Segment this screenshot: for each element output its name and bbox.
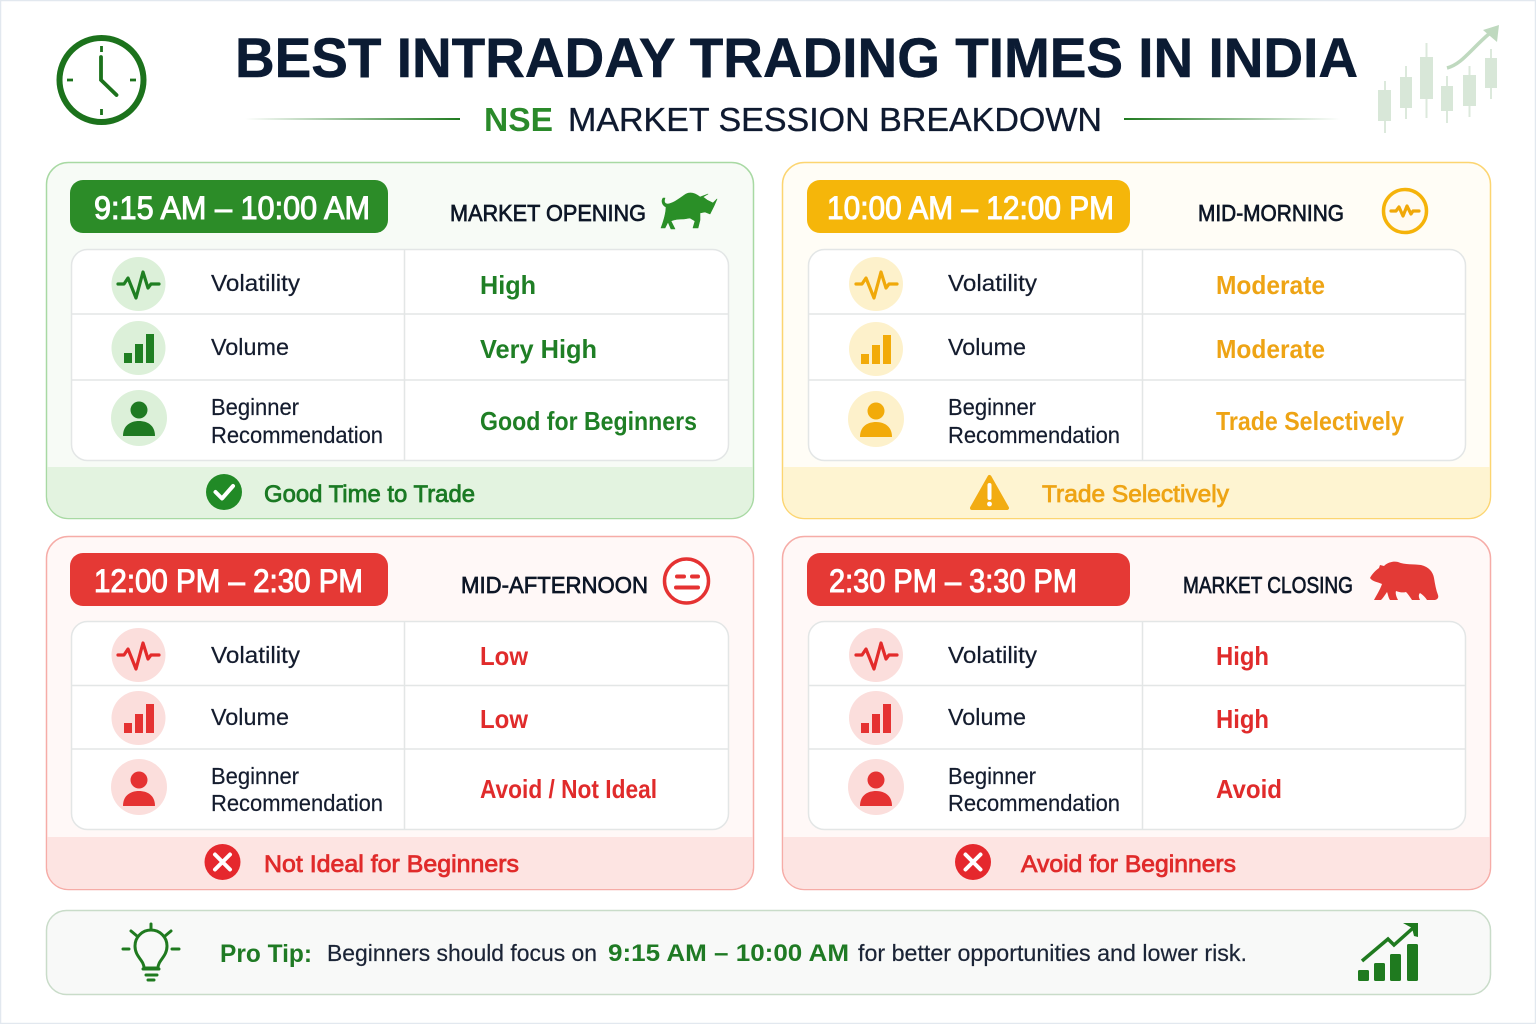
row: volume	[112, 691, 529, 745]
row: volatility	[849, 628, 1269, 682]
tip text: Beginners should focus on	[327, 940, 597, 966]
row: beginner recommendation	[111, 759, 657, 816]
metrics table	[72, 250, 728, 460]
session name: MID-AFTERNOON	[461, 572, 648, 598]
verdict: trade selectively	[972, 477, 1230, 508]
row: beginner recommendation: Recommendation	[211, 790, 383, 816]
row: volume: Moderate	[1216, 334, 1325, 364]
verdict: avoid for beginners	[955, 844, 1236, 880]
row: volatility: Moderate	[1216, 270, 1325, 300]
row: beginner recommendation: Beginner	[211, 394, 299, 420]
panel: pro tip	[46, 910, 1490, 994]
row: beginner recommendation	[848, 391, 1404, 448]
tip text: Pro Tip:	[220, 940, 312, 968]
row: beginner recommendation: Avoid	[1216, 774, 1282, 804]
time badge: 9:15 AM – 10:00 AM	[94, 190, 370, 226]
time badge: 2:30 PM – 3:30 PM	[829, 563, 1077, 599]
row: volatility: Volatility	[211, 642, 301, 668]
row: volume: High	[1216, 704, 1269, 734]
metrics table	[808, 250, 1466, 460]
time badge: 12:00 PM – 2:30 PM	[94, 563, 363, 599]
icon: light bulb	[123, 924, 179, 980]
row: volatility	[112, 257, 536, 311]
row: volatility	[849, 257, 1325, 311]
time badge	[70, 553, 388, 606]
row: beginner recommendation: Avoid / Not Ideal	[480, 774, 657, 804]
subtitle: NSE	[484, 101, 553, 138]
row: volume: Volume	[948, 334, 1026, 360]
row: volume: Volume	[948, 704, 1026, 730]
row: volume	[849, 322, 1325, 376]
row: volatility: High	[1216, 641, 1269, 671]
row: volatility: Low	[480, 641, 529, 671]
verdict: avoid for beginners: Avoid for Beginners	[1021, 851, 1236, 878]
title: BEST INTRADAY TRADING TIMES IN INDIA	[235, 26, 1358, 89]
verdict: not ideal for beginners: Not Ideal for Beginners	[264, 851, 519, 878]
verdict: good time to trade: Good Time to Trade	[264, 481, 475, 508]
panel: 12:00 PM to 2:30 PM	[46, 536, 754, 890]
row: volume: Volume	[211, 334, 289, 360]
row: volume: Very High	[480, 334, 597, 364]
row: volatility: High	[480, 270, 536, 300]
session name: MARKET OPENING	[450, 200, 646, 226]
tip text	[220, 940, 1247, 968]
session name: MARKET CLOSING	[1183, 572, 1353, 598]
icon: neutral face	[664, 559, 708, 603]
row: volume: Low	[480, 704, 529, 734]
row: volatility: Volatility	[948, 270, 1038, 296]
time badge: 10:00 AM – 12:00 PM	[827, 190, 1114, 226]
icon: bear	[1370, 562, 1438, 600]
row: volatility	[112, 628, 529, 682]
row: volatility: Volatility	[211, 270, 301, 296]
row: beginner recommendation: Beginner	[948, 394, 1036, 420]
row: beginner recommendation: Recommendation	[211, 422, 383, 448]
row: beginner recommendation	[111, 390, 697, 448]
row: volume	[849, 691, 1269, 745]
panel: 10:00 AM to 12:00 PM	[782, 162, 1490, 518]
metrics table	[808, 622, 1466, 830]
row: beginner recommendation: Recommendation	[948, 422, 1120, 448]
subtitle	[245, 101, 1340, 138]
row: beginner recommendation: Trade Selectively	[1216, 406, 1404, 436]
row: volatility: Volatility	[948, 642, 1038, 668]
session name: MID-MORNING	[1198, 200, 1344, 226]
icon: clock	[60, 38, 144, 122]
row: beginner recommendation: Beginner	[211, 763, 299, 789]
verdict: trade selectively: Trade Selectively	[1042, 481, 1230, 508]
row: beginner recommendation: Recommendation	[948, 790, 1120, 816]
verdict: good time to trade	[206, 474, 475, 510]
icon: rising bar chart	[1358, 923, 1418, 981]
icon: pulse badge	[1384, 190, 1426, 232]
metrics table	[72, 622, 728, 830]
tip text: 9:15 AM – 10:00 AM	[608, 940, 849, 967]
time badge	[70, 180, 388, 233]
subtitle: MARKET SESSION BREAKDOWN	[568, 101, 1102, 138]
verdict: not ideal for beginners	[204, 844, 519, 880]
time badge	[807, 180, 1130, 233]
row: beginner recommendation: Beginner	[948, 763, 1036, 789]
row: volume: Volume	[211, 704, 289, 730]
time badge	[807, 553, 1130, 606]
row: beginner recommendation	[848, 759, 1282, 816]
row: volume	[112, 321, 597, 375]
panel: 2:30 PM to 3:30 PM	[782, 536, 1490, 890]
icon: faded candlestick chart	[1378, 25, 1499, 133]
tip text: for better opportunities and lower risk.	[858, 940, 1247, 966]
row: beginner recommendation: Good for Beginners	[480, 406, 697, 436]
icon: bull	[661, 193, 717, 229]
panel: 9:15 AM to 10:00 AM	[46, 162, 754, 518]
